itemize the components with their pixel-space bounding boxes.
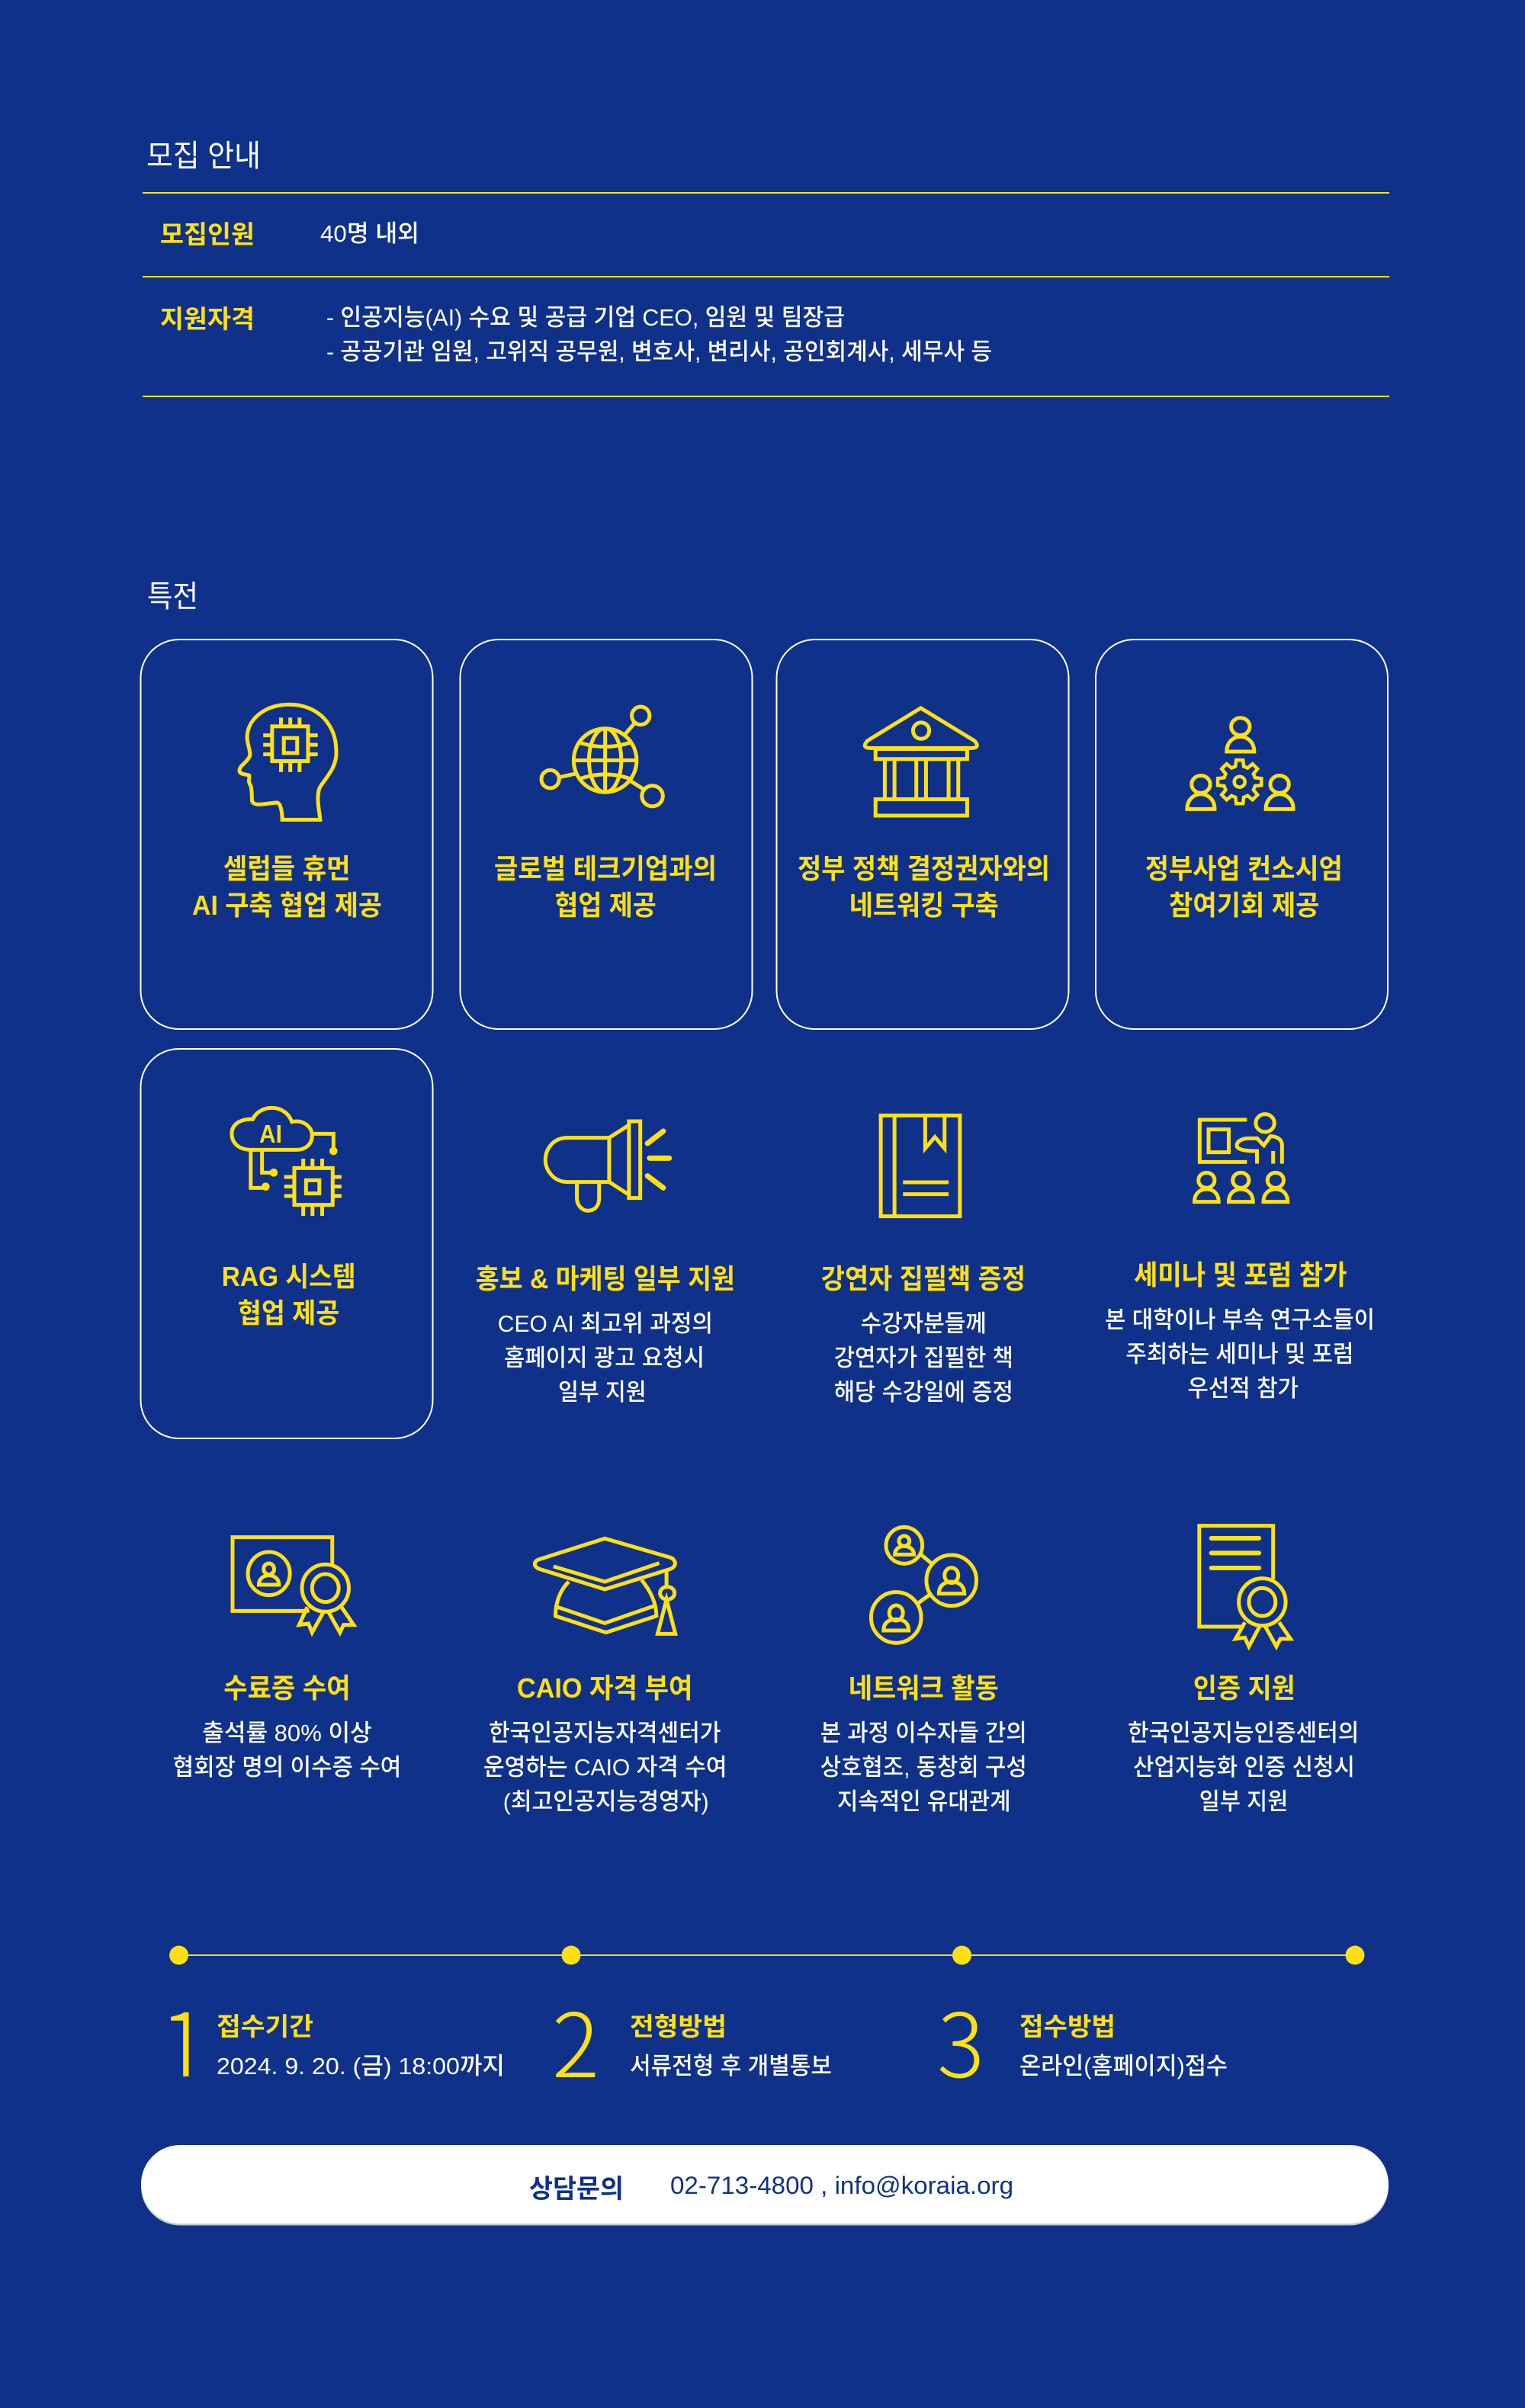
contact pill [141,2145,1389,2226]
step 3: application method [937,1975,1228,2103]
row value: headcount: 40명 내외 [320,220,419,247]
item title: 홍보 & 마케팅 일부 지원 [476,1263,735,1294]
item description: 일부 지원 [1199,1788,1288,1815]
step 2: selection method [552,1975,832,2103]
card title [192,853,382,921]
row value: eligibility: - 공공기관 임원, 고위직 공무원, 변호사, 변리사, 공인회계사, 세무사 등 [326,338,992,365]
item title: 세미나 및 포럼 참가 [1134,1259,1347,1291]
item title: 강연자 집필책 증정 [821,1263,1026,1294]
item description: 협회장 명의 이수증 수여 [173,1754,401,1781]
icon: graduation cap [535,1538,676,1634]
timeline [169,1945,1365,1965]
panel: completion certificate [173,1537,401,1781]
item description: 한국인공지능자격센터가 [489,1720,721,1746]
icon: presenter and audience [1194,1114,1288,1202]
icon: head with chip [239,704,336,819]
step description: 서류전형 후 개별통보 [630,2053,832,2079]
item description: 본 대학이나 부속 연구소들이 [1105,1307,1375,1333]
card title: 네트워킹 구축 [849,890,999,921]
item title: 인증 지원 [1193,1672,1295,1704]
icon: book with bookmark [881,1115,960,1217]
icon: globe network [541,707,663,806]
item description: CEO AI 최고위 과정의 [498,1310,713,1337]
item description: 강연자가 집필한 책 [834,1345,1013,1371]
card title: 협업 제공 [554,890,657,921]
icon: AI cloud and chip: AI [259,1120,282,1148]
item description [483,1720,727,1815]
icon: government building [865,708,977,816]
icon: megaphone [545,1121,669,1210]
panel: global tech card [461,640,752,1029]
card title [222,1261,356,1329]
item description: 지속적인 유대관계 [837,1788,1011,1815]
panel: recruitment info [143,139,1389,396]
numeral 1: 1 [159,1971,210,2109]
item title: 네트워크 활동 [849,1672,999,1704]
contact label: 상담문의 [529,2175,624,2204]
item description: 본 과정 이수자들 간의 [820,1720,1027,1746]
item description [834,1310,1013,1406]
card title: AI 구축 협업 제공 [192,890,382,921]
item description: 해당 수강일에 증정 [834,1379,1013,1406]
item description: 주최하는 세미나 및 포럼 [1125,1341,1354,1368]
card title: 글로벌 테크기업과의 [494,853,717,884]
row value: eligibility [326,304,992,365]
step 1: application period [171,2012,502,2079]
icon: certificate with seal [233,1537,354,1633]
item description: 출석률 80% 이상 [202,1720,372,1746]
step title: 접수기간 [217,2012,313,2041]
panel: RAG system card [140,1049,433,1438]
card title [798,853,1050,921]
item title: 수료증 수여 [223,1672,351,1704]
panel: network activity [820,1527,1027,1815]
card title: 정부사업 컨소시엄 [1145,853,1343,884]
item description: 운영하는 CAIO 자격 수여 [483,1754,727,1781]
card title: 협업 제공 [238,1297,339,1329]
item title: CAIO 자격 부여 [517,1672,692,1704]
item description: 수강자분들께 [861,1310,987,1337]
numeral 2: 2 [552,1975,599,2103]
panel: government policy card [776,640,1069,1029]
icon: AI cloud and chip [232,1108,342,1216]
item description: 산업지능화 인증 신청시 [1133,1754,1355,1781]
item description: 한국인공지능인증센터의 [1128,1720,1359,1746]
panel: certification support [1128,1526,1359,1815]
icon: document with seal [1199,1526,1290,1646]
item description: 상호협조, 동창회 구성 [820,1754,1027,1781]
row label: eligibility: 지원자격 [160,305,255,333]
item description [1128,1720,1359,1815]
item description [1105,1307,1375,1402]
panel: celebrity human card [140,640,433,1029]
heading: benefits: 특전 [147,580,198,614]
item description [173,1720,401,1781]
panel: consortium card [1096,640,1388,1029]
card title: 셀럽들 휴먼 [223,853,351,884]
card title: RAG 시스템 [222,1261,356,1292]
item description: (최고인공지능경영자) [503,1788,709,1815]
item description [820,1720,1027,1815]
row label: headcount: 모집인원 [160,220,255,248]
panel: CAIO qualification [483,1538,727,1815]
row value: eligibility: - 인공지능(AI) 수요 및 공급 기업 CEO, 임원 및 팀장급 [326,304,845,331]
numeral 3: 3 [937,1975,984,2103]
card title [494,853,717,921]
step title: 전형방법 [630,2012,727,2041]
item description: 홈페이지 광고 요청시 [504,1345,705,1371]
panel: promotion and marketing [476,1121,735,1406]
icon: people and gear [1187,718,1293,809]
panel: speaker book gift [821,1115,1026,1406]
item description: 우선적 참가 [1187,1375,1299,1402]
step title: 접수방법 [1019,2012,1116,2041]
contact details: 02-713-4800 , info@koraia.org [670,2172,1013,2199]
panel: seminar and forum [1105,1114,1375,1402]
card title: 정부 정책 결정권자와의 [798,853,1050,884]
heading: recruitment info: 모집 안내 [146,139,261,173]
icon: connected people [871,1527,977,1643]
card title: 참여기회 제공 [1169,890,1319,921]
item description [498,1310,713,1406]
card title [1145,853,1343,921]
step description: 온라인(홈페이지)접수 [1019,2053,1228,2079]
step description: 2024. 9. 20. (금) 18:00까지 [217,2053,505,2079]
item description: 일부 지원 [558,1379,647,1406]
